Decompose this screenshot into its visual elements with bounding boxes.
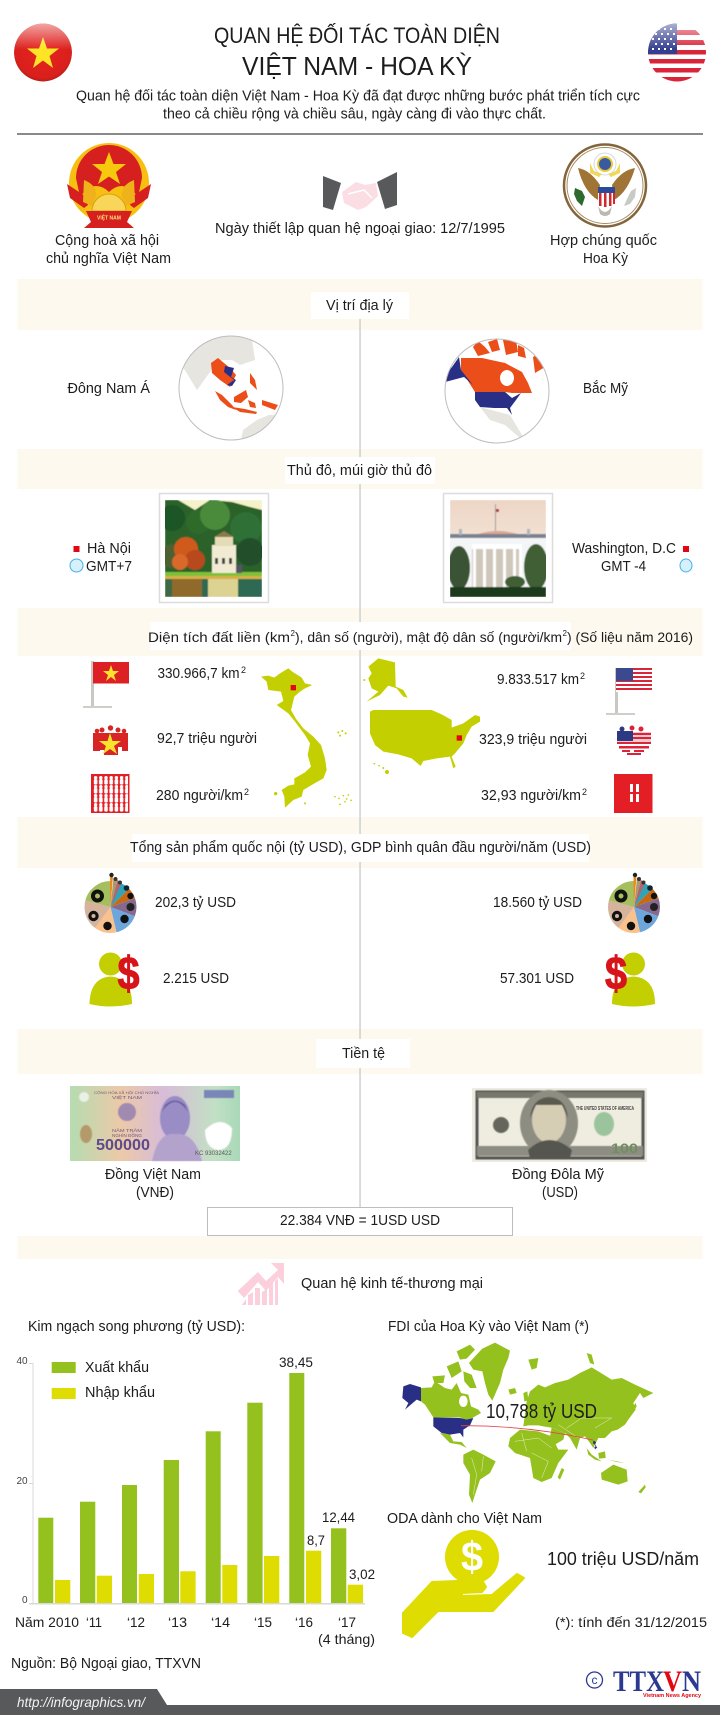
value: Viet Nam density: 280 người/km [156,787,243,804]
caption: Viet Nam: chủ nghĩa Việt Nam [46,250,171,267]
footnote: (*): tính đến 31/12/2015 [555,1614,707,1630]
caption: VND: (VNĐ) [136,1184,174,1201]
value: USA GDP per capita: 57.301 USD [500,970,574,987]
y axis: 20 [16,1476,28,1487]
icon: Viet Nam density [91,774,130,813]
y axis [16,1356,365,1606]
y axis: 40 [16,1356,28,1367]
emblem: Viet Nam: VIỆT NAM [97,214,121,222]
logo: TTXVN: TTX [613,1665,664,1698]
heading: area and population: ) (Số liệu năm 2016) [567,629,693,645]
value labels: 3,02 [349,1566,375,1582]
banknote: VND 500000 [70,1086,240,1161]
icon: USA density [614,774,652,813]
logo: TTXVN: N [682,1665,701,1698]
value: Viet Nam GDP: 202,3 tỷ USD [155,894,236,911]
exchange rate box: 22.384 VNĐ = 1USD USD [280,1212,440,1229]
label: North America: Bắc Mỹ [583,380,628,397]
icon: trend arrow [238,1263,284,1305]
icon: Viet Nam GDP per capita [90,947,140,1006]
title: QUAN HỆ ĐỐI TÁC TOÀN DIỆN [214,22,500,48]
year labels: ‘12 [127,1614,145,1630]
value labels [279,1354,375,1582]
value: Viet Nam GDP per capita: 2.215 USD [163,970,229,987]
title: VIỆT NAM - HOA KỲ [242,51,472,81]
capital: Washington [572,540,692,575]
title [214,22,500,81]
year labels [15,1614,375,1647]
value: USA density: 2 [582,787,587,797]
value: Viet Nam area: 330.966,7 km [158,665,240,682]
heading: location: Vị trí địa lý [326,297,393,314]
banknote: VND 500000: CỘNG HÒA XÃ HỘI CHỦ NGHĨA [94,1090,159,1095]
emblem: Viet Nam [67,143,151,228]
intro text: Quan hệ đối tác toàn diện Việt Nam - Hoa Kỳ đã đạt được những bước phát triển tích cực [76,88,640,104]
value: Viet Nam area: 2 [241,665,246,675]
pie icon: USA GDP [612,873,658,930]
label: Southeast Asia: Đông Nam Á [68,380,150,397]
map: Viet Nam [261,668,352,808]
icon: handshake [323,172,397,210]
banknote: USD 100 [472,1088,647,1162]
caption: USA: Hợp chúng quốc [550,232,657,249]
globe: Southeast Asia [178,336,284,440]
caption: Viet Nam: Cộng hoà xã hội [55,232,159,249]
logo: TTXVN [586,1665,702,1699]
icon: Viet Nam flag on pole [83,661,129,708]
caption: USA: Hoa Kỳ [583,250,628,267]
establishment date: Ngày thiết lập quan hệ ngoại giao: 12/7/1995 [215,220,505,237]
capital: Ha Noi: Hà Nội [87,540,131,557]
icon: hand holding coin: $ [461,1533,483,1580]
heading: capital [285,457,435,484]
heading: area and population: 2 [562,629,568,638]
logo: TTXVN: V [663,1665,682,1698]
bar chart: bilateral trade [15,1354,375,1647]
value: USA population: 323,9 triệu người [479,731,587,748]
heading: currency [316,1039,410,1068]
year labels: ‘13 [168,1614,187,1630]
capital: Washington: GMT -4 [601,558,646,575]
caption: USD: Đồng Đôla Mỹ [512,1166,604,1183]
intro text [76,88,640,122]
value: Viet Nam density: 2 [244,787,249,797]
year labels: ‘15 [254,1614,272,1630]
banknote: USD 100: THE UNITED STATES OF AMERICA [576,1106,634,1112]
icon: USA flag on pole [606,668,652,715]
value: USA density: 32,93 người/km [481,787,581,804]
heading: GDP [130,834,591,862]
icon: USA population [617,726,651,755]
flag badge: Viet Nam [14,24,72,82]
legend: Xuất khẩu [85,1359,149,1376]
value: USA GDP: 18.560 tỷ USD [493,894,582,911]
heading: area and population: ), dân số (người), mật độ dân số (người/km [295,629,562,645]
footer bar: http://infographics.vn/ [17,1694,147,1710]
heading: currency: Tiền tệ [342,1045,385,1062]
exchange rate box [208,1208,512,1236]
map: world FDI [402,1343,653,1503]
year labels: ‘17 [338,1614,356,1630]
heading: trade relations: Quan hệ kinh tế-thương mại [301,1275,483,1292]
caption: VND [105,1166,201,1201]
value labels: 38,45 [279,1354,313,1370]
heading: area and population: Diện tích đất liền (km [148,629,290,645]
export bars [38,1373,346,1603]
heading: ODA: ODA dành cho Việt Nam [387,1510,542,1527]
value: USA area: 2 [580,671,585,681]
source: Nguồn: Bộ Ngoại giao, TTXVN [11,1655,201,1672]
value labels: 12,44 [322,1509,355,1525]
heading: bilateral trade: Kim ngạch song phương (tỷ USD): [28,1318,245,1335]
legend: Nhập khẩu [85,1384,155,1401]
banknote: USD 100: 100 [611,1140,638,1156]
footer bar [0,1689,720,1715]
banknote: VND 500000: VIỆT NAM [112,1093,142,1100]
banknote: VND 500000: NĂM TRĂM [112,1127,142,1133]
year labels: ‘11 [86,1614,102,1630]
value: Viet Nam population: 92,7 triệu người [157,730,257,747]
year labels: ‘14 [211,1614,230,1630]
caption: USA [550,232,657,267]
icon: USA GDP per capita [605,947,655,1006]
heading: area and population: 2 [290,629,296,638]
heading: capital: Thủ đô, múi giờ thủ đô [287,462,432,479]
photo: Hoan Kiem lake [159,494,268,602]
logo: TTXVN: c [592,1673,598,1687]
heading: FDI: FDI của Hoa Kỳ vào Việt Nam (*) [388,1318,589,1335]
callout: ODA value: 100 triệu USD/năm [547,1549,699,1569]
y axis: 0 [22,1595,28,1606]
value: USA area: 9.833.517 km [497,671,579,688]
logo: TTXVN: Vietnam News Agency [643,1693,702,1699]
import bars [55,1551,363,1603]
section bands [18,279,702,1259]
heading: location [311,292,409,319]
caption: Viet Nam [46,232,171,267]
icon: Viet Nam population [93,725,128,755]
flag badge: USA [648,23,706,82]
capital: Ha Noi: GMT+7 [86,558,132,575]
map: USA [363,658,480,774]
banknote: VND 500000: 500000 [96,1137,150,1154]
emblem: USA seal [564,144,646,226]
legend [52,1359,155,1401]
value labels: 8,7 [307,1532,325,1548]
banknote: VND 500000: KC 93032422 [195,1151,232,1157]
icon: hand holding coin [403,1530,524,1637]
heading: GDP: Tổng sản phẩm quốc nội (tỷ USD), GDP bình quân đầu người/năm (USD) [130,839,591,856]
pie icon: Viet Nam GDP [88,873,134,930]
intro text: theo cả chiều rộng và chiều sâu, ngày càng đi vào thực chất. [163,106,546,122]
caption: VND: Đồng Việt Nam [105,1166,201,1183]
year labels: ‘16 [295,1614,313,1630]
caption: USD: (USD) [542,1184,578,1201]
capital: Washington: Washington, D.C [572,540,676,557]
banknote: VND 500000: NGHÌN ĐỒNG [112,1132,143,1138]
callout: FDI value: 10,788 tỷ USD [486,1401,597,1423]
heading: area and population [148,622,693,650]
globe: North America [445,339,549,445]
photo: White House [444,494,552,602]
year labels: (4 tháng) [318,1631,375,1647]
icon: USA GDP per capita: $ [605,947,627,999]
year labels: Năm 2010 [15,1614,79,1630]
capital: Ha Noi [70,540,132,575]
icon: Viet Nam GDP per capita: $ [118,947,140,999]
caption: USD [512,1166,604,1201]
